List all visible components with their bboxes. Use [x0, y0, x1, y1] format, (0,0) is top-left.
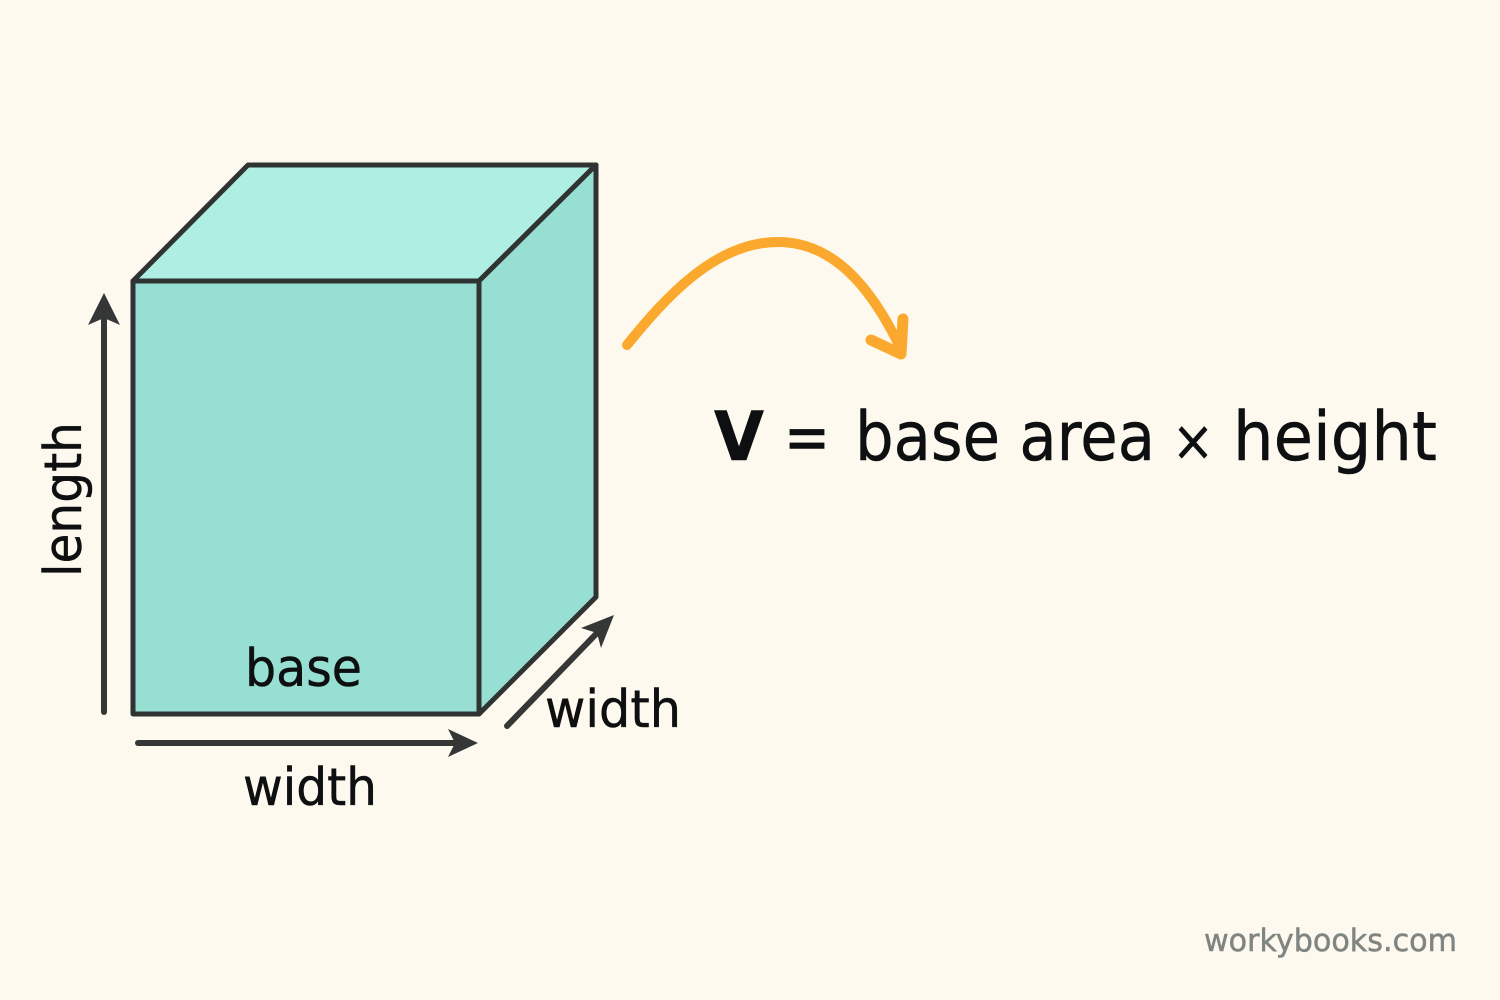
- formula equals sign: =: [784, 398, 830, 477]
- arrow: depth width: [507, 615, 614, 726]
- watermark: workybooks.com: [1204, 923, 1457, 959]
- rectangular prism: [133, 165, 596, 714]
- formula variable V: V: [714, 398, 764, 477]
- prism top face: [133, 165, 596, 281]
- curved orange arrow: [627, 242, 903, 354]
- formula expression: height: height: [1233, 398, 1437, 477]
- label: front width: width: [243, 758, 377, 818]
- formula times sign: ×: [1172, 409, 1214, 474]
- formula: [714, 398, 1437, 477]
- label: length: length: [34, 422, 94, 577]
- formula expression: base area: base area: [855, 398, 1155, 477]
- arrow: length: [88, 293, 120, 712]
- prism front face: [133, 281, 479, 714]
- arrow: front width: [138, 729, 478, 757]
- label: depth width: width: [545, 680, 681, 740]
- prism side face: [479, 165, 596, 714]
- label: base: base: [245, 639, 362, 699]
